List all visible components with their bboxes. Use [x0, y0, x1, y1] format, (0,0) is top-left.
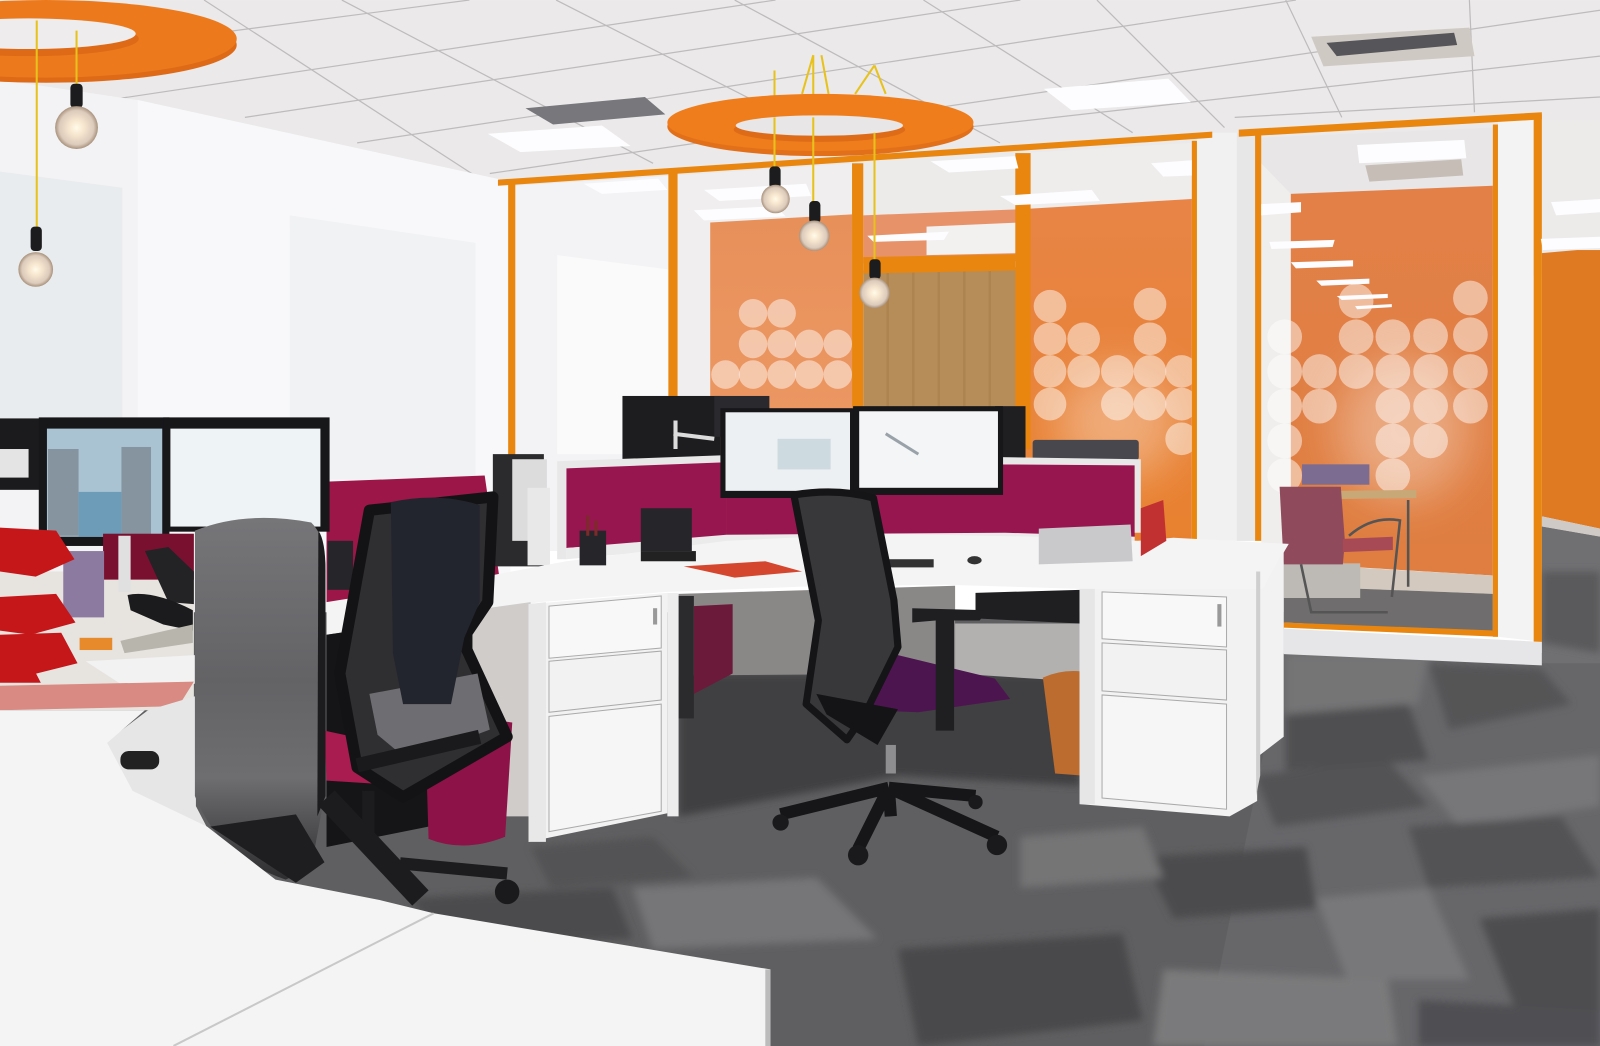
meeting room floor [1284, 586, 1493, 633]
orange waste bin [1043, 671, 1082, 776]
chair frame [340, 497, 507, 797]
dark tower between desks [493, 454, 550, 566]
wooden door [863, 267, 1016, 408]
magenta waste bin [426, 721, 512, 845]
white columns [1197, 116, 1534, 641]
ceiling [0, 0, 1600, 276]
right pedestal drawers [1080, 551, 1284, 816]
meeting room skirting [1284, 563, 1493, 594]
centre black chair with purple seat [772, 492, 1010, 865]
pale reflections on glass [1056, 357, 1469, 500]
stapler [128, 594, 193, 631]
carpet tile patches [408, 571, 1600, 1046]
pendant cords above ring [774, 55, 886, 102]
far right orange wall [1542, 248, 1600, 529]
left wall [0, 80, 510, 612]
front desk pedestal [102, 696, 209, 849]
centre magenta desk screens [557, 455, 1141, 559]
orange ring light top left [0, 0, 237, 83]
under desk furniture and waste bins [327, 586, 1082, 847]
pendant cords below ring [37, 20, 874, 263]
left grey office chair [195, 518, 519, 904]
telephone [145, 547, 194, 604]
partition base plinth [1284, 629, 1542, 665]
vent reflection [1365, 159, 1463, 182]
black chair with scarf [324, 497, 507, 837]
left pedestal drawers [529, 593, 679, 842]
meeting room furniture behind glass [1280, 464, 1416, 612]
left monitors [0, 417, 330, 546]
orange ring light centre [667, 94, 973, 156]
carpet floor [0, 527, 1600, 1046]
back rooms seen through glass [513, 120, 1600, 633]
window blind centre [290, 215, 476, 480]
desk accessories [328, 500, 1166, 590]
left desk clutter [0, 528, 195, 710]
black scarf [391, 498, 480, 704]
pendant bulbs [18, 84, 890, 308]
orange window frames [498, 112, 1542, 643]
loose papers [86, 655, 195, 684]
left magenta desk screen [327, 476, 500, 612]
centre dual monitors [720, 406, 1003, 498]
ceiling vent centre [526, 97, 665, 125]
ceiling lights [488, 79, 1600, 309]
window blind left [0, 171, 122, 420]
frosted pane above door [927, 222, 1020, 255]
red letter trays [0, 528, 78, 683]
back monitors [622, 396, 1139, 461]
main white desk top [327, 534, 1289, 635]
frosted dot decals [711, 281, 1488, 493]
ceiling vent right [1311, 28, 1474, 66]
pedestal handle [120, 751, 159, 769]
front white desk [0, 710, 770, 1046]
magenta under-desk bin [694, 604, 733, 694]
folder [0, 682, 194, 710]
